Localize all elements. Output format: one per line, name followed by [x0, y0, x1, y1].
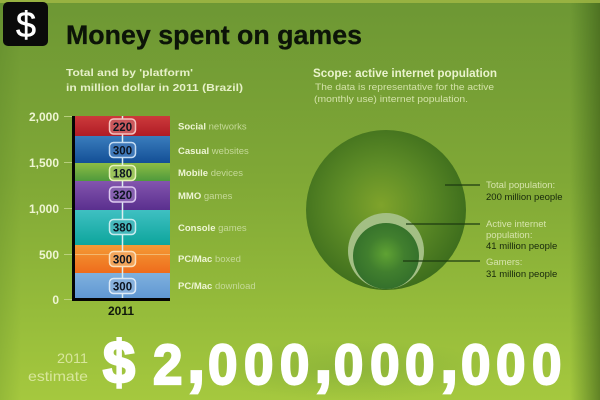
value pills	[110, 119, 136, 294]
category labels: MMO games	[178, 191, 233, 202]
y axis labels: 1,000	[29, 202, 59, 216]
big total figure: ,	[187, 317, 206, 398]
category labels: PC/Mac boxed	[178, 254, 241, 265]
scope description: The data is representative for the active	[315, 82, 494, 93]
y axis labels: 500	[39, 248, 59, 262]
value pills: 320	[113, 190, 132, 202]
big total figure: ,	[314, 317, 333, 398]
category labels: Console games	[178, 223, 247, 234]
estimate label: 2011	[57, 350, 88, 366]
circle: total population	[306, 130, 466, 290]
centre line	[122, 116, 124, 298]
estimate label: estimate	[28, 368, 88, 384]
label: total population	[486, 180, 563, 203]
value pills: 380	[113, 222, 132, 234]
category labels: Mobile devices	[178, 168, 243, 179]
label: active internet population: population:	[486, 230, 532, 241]
value pills: 220	[113, 122, 132, 134]
label: total population: 200 million people	[486, 192, 563, 203]
big total figure: ,	[440, 317, 459, 398]
y axis labels: 2,000	[29, 110, 59, 124]
value pills: 300	[113, 282, 132, 294]
y axis labels: 0	[52, 293, 59, 307]
category labels: Casual websites	[178, 146, 249, 157]
big total figure: 0	[244, 332, 274, 396]
chart subtitle: Total and by 'platform'	[66, 67, 193, 79]
category labels	[178, 122, 256, 292]
big total figure: 0	[370, 332, 400, 396]
label: active internet population	[486, 219, 557, 252]
circle: active internet population	[348, 213, 424, 289]
big total figure: $	[103, 329, 135, 396]
label: active internet population: 41 million people	[486, 241, 557, 252]
label: total population: Total population:	[486, 180, 555, 191]
leader lines	[403, 185, 480, 261]
nested circles chart	[306, 130, 480, 290]
scope heading: Scope: active internet population	[313, 68, 497, 80]
big total figure	[103, 317, 561, 398]
big total figure: 0	[334, 332, 363, 396]
big total figure: 2	[153, 332, 182, 396]
label: gamers	[486, 257, 557, 280]
chart subtitle	[66, 67, 243, 94]
category labels: Social networks	[178, 122, 247, 132]
scope description	[314, 82, 494, 105]
bar axes	[74, 116, 170, 300]
chart subtitle: in million dollar in 2011 (Brazil)	[66, 82, 243, 94]
scope description: (monthly use) internet population.	[314, 94, 468, 105]
big total figure: 0	[532, 332, 561, 396]
value pills: 300	[113, 254, 132, 266]
label: active internet population: Active internet	[486, 219, 547, 230]
label: gamers: 31 million people	[486, 269, 557, 280]
label: gamers: Gamers:	[486, 257, 522, 268]
title: Money spent on games	[66, 20, 362, 50]
big total figure: 0	[496, 332, 525, 396]
circle: gamers	[353, 223, 419, 289]
y axis labels: 1,500	[29, 156, 59, 170]
bar segments	[75, 116, 170, 299]
value pills: 180	[113, 168, 132, 180]
estimate label	[28, 350, 88, 384]
big total figure: 0	[280, 332, 309, 396]
big total figure: 0	[461, 332, 490, 396]
category labels: PC/Mac download	[178, 281, 256, 292]
big total figure: 0	[208, 332, 237, 396]
stacked bar chart	[29, 110, 256, 318]
icon: dollar badge: $	[16, 4, 36, 45]
y axis labels	[29, 110, 59, 307]
icon: dollar badge	[3, 2, 48, 46]
value pills: 300	[113, 146, 132, 158]
y axis ticks	[64, 116, 73, 300]
x axis label: 2011	[108, 304, 134, 318]
big total figure: 0	[405, 332, 434, 396]
